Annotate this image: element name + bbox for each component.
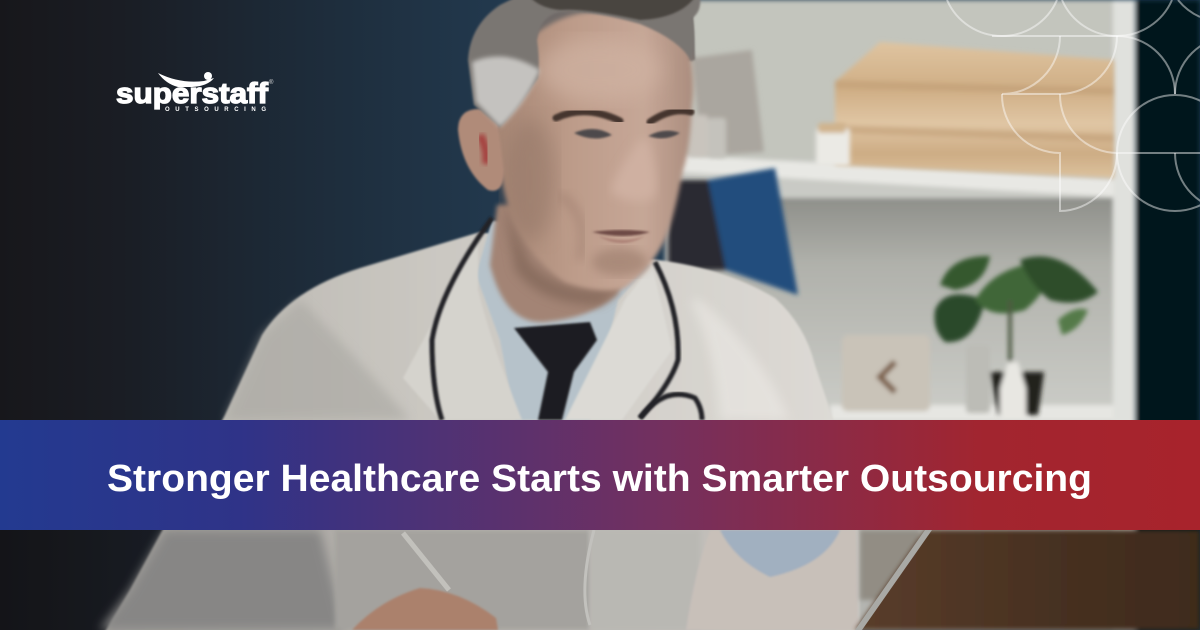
- registered mark: ®: [269, 79, 274, 86]
- shirt: [476, 220, 650, 420]
- lapels: [403, 238, 522, 420]
- nose: [611, 140, 656, 201]
- head: [495, 11, 693, 290]
- decorative geometric outline pattern: [947, 0, 1200, 211]
- wooden box on shelf: [835, 42, 1114, 178]
- logo swoosh: [158, 73, 214, 87]
- eyes: [574, 129, 612, 139]
- tie: [514, 322, 597, 420]
- neck: [490, 200, 640, 322]
- eyebrows: [556, 112, 620, 121]
- doctor figure: [100, 0, 860, 630]
- headline text: Stronger Healthcare Starts with Smarter Outsourcing: [107, 458, 1092, 500]
- shelf objects: picture frame, jars, white cup: [688, 50, 850, 166]
- hair backing: [480, 0, 695, 85]
- logo wordmark: superstaff: [116, 78, 268, 110]
- stethoscope tube lower: [585, 530, 594, 625]
- lab coat: [100, 232, 860, 630]
- lower foreground details: [352, 530, 1200, 630]
- hair: [468, 0, 700, 127]
- bottom darkening overlay: [0, 530, 1200, 630]
- headline banner: [0, 420, 1200, 530]
- potted plant and clock: [842, 256, 1098, 417]
- ear: [458, 109, 504, 191]
- logo subtext: OUTSOURCING: [165, 107, 266, 113]
- face shading: [504, 118, 556, 242]
- laptop: [855, 530, 1200, 630]
- blue binder: [668, 168, 798, 295]
- mask pouch: [686, 530, 858, 630]
- stethoscope: [432, 218, 492, 420]
- mouth: [592, 230, 650, 236]
- coat shading and folds: [225, 300, 410, 420]
- pen: [403, 533, 449, 590]
- bookshelf background: [665, 0, 1200, 630]
- hand: [352, 588, 498, 630]
